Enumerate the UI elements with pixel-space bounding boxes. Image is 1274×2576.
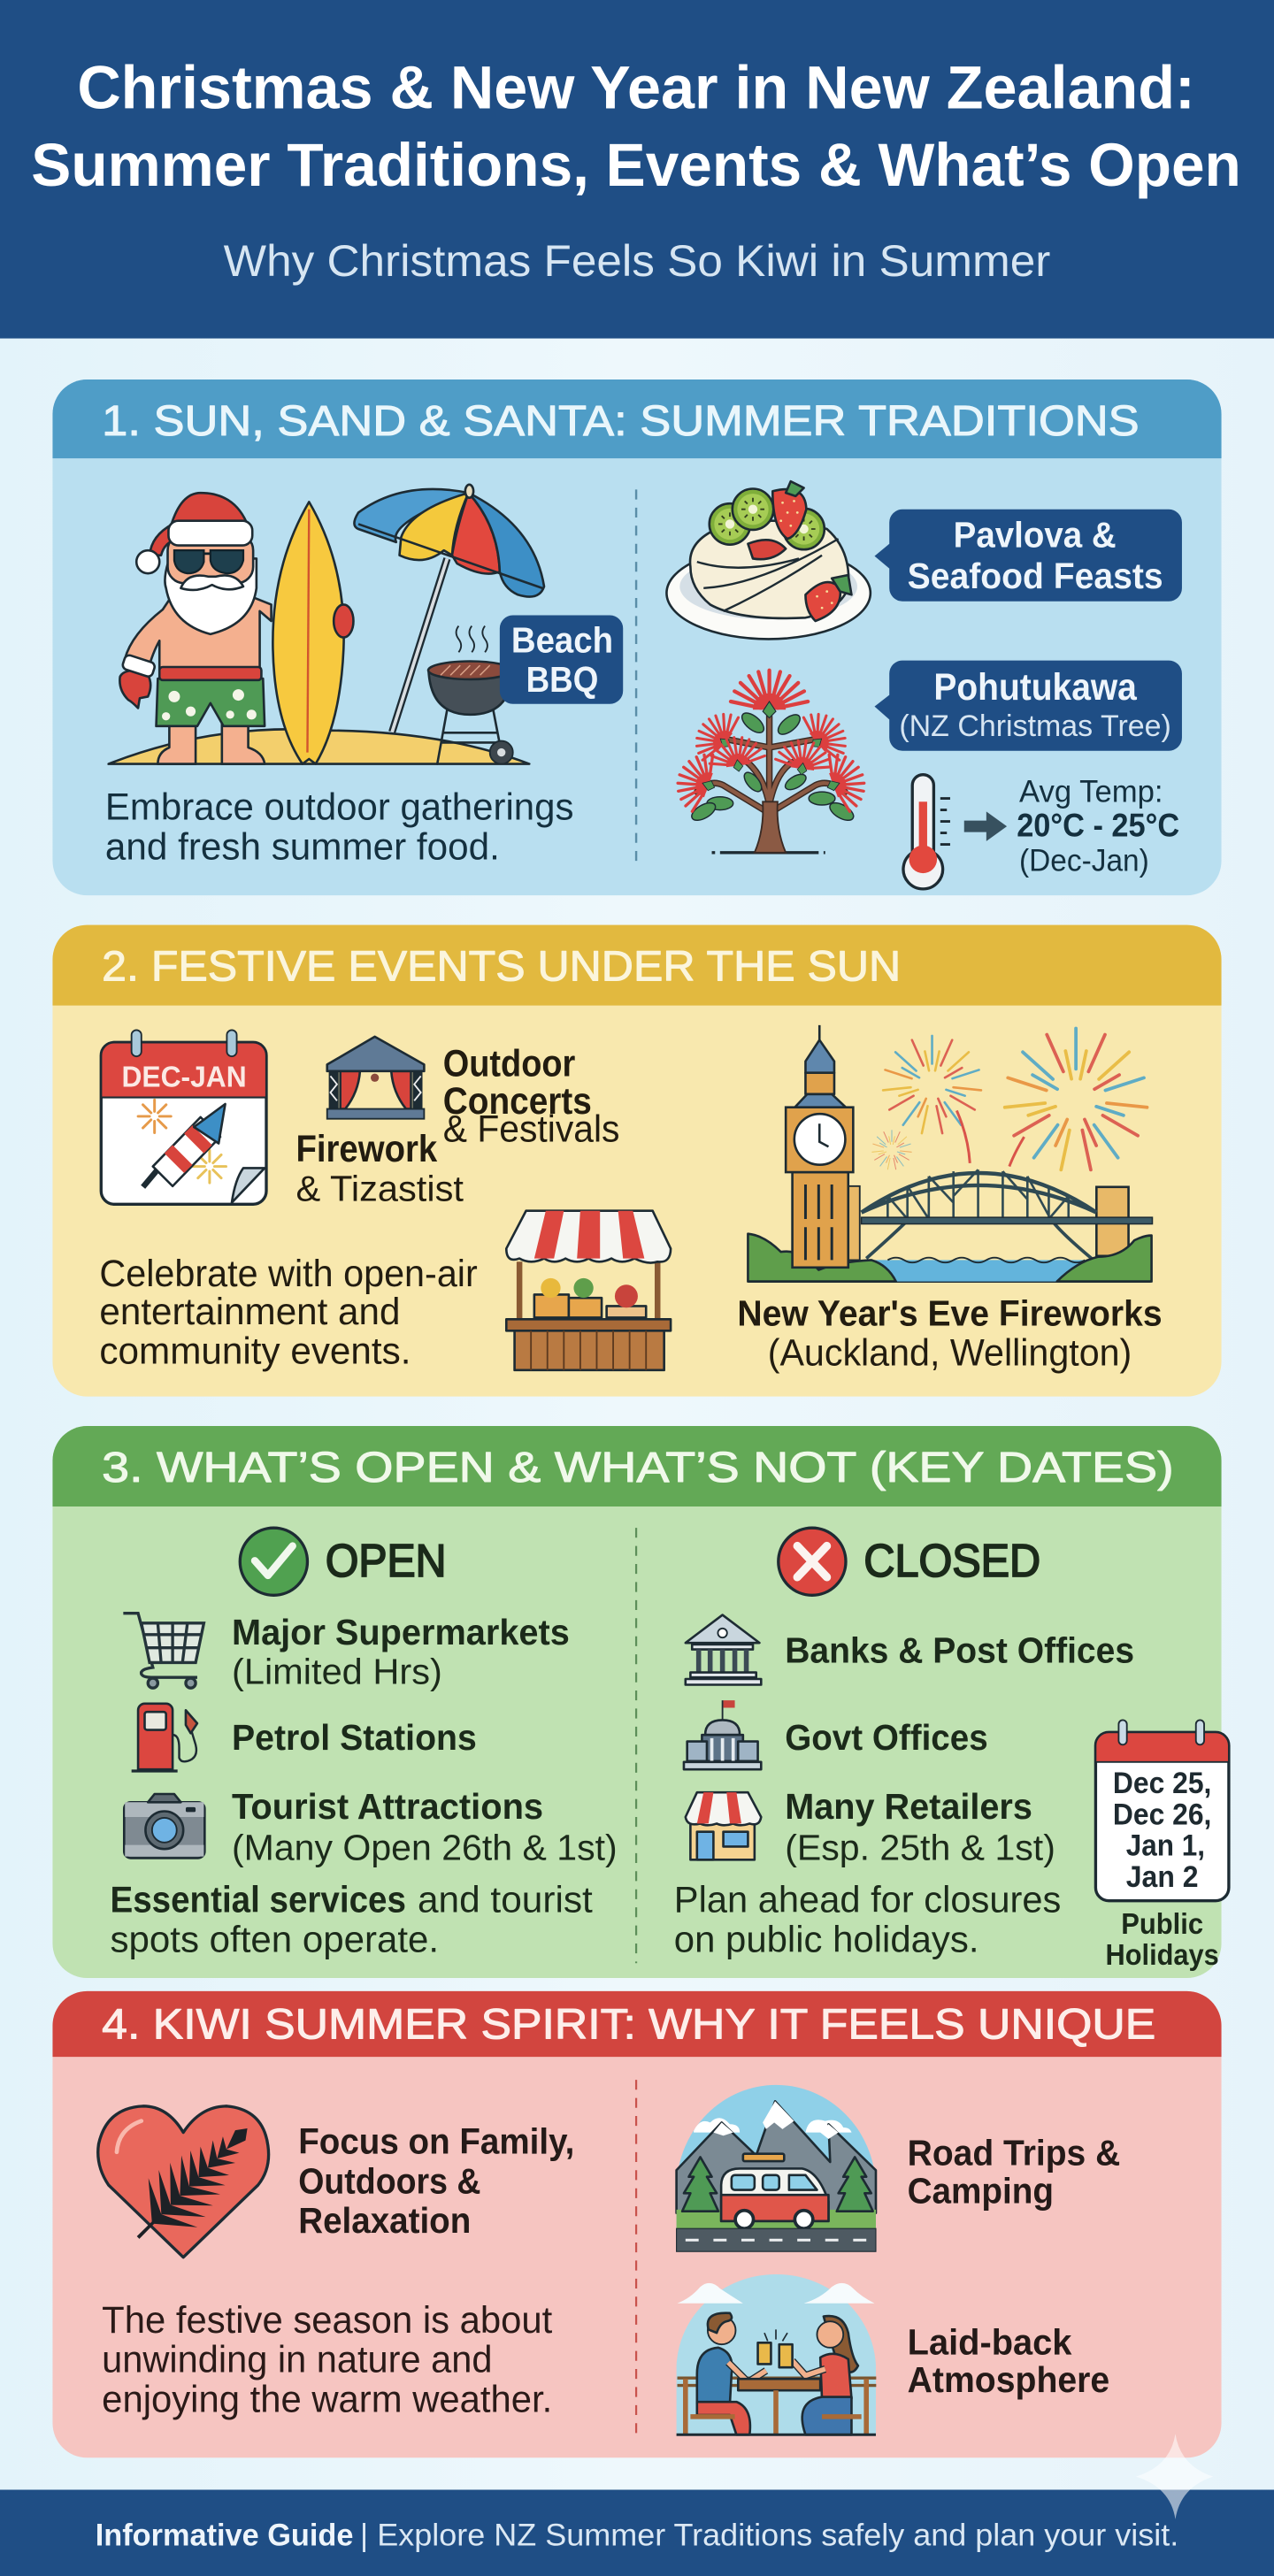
label: outdoor concerts and festivals: Outdoor xyxy=(443,1042,575,1085)
icon: government building xyxy=(684,1700,761,1769)
text: banks and post offices: Banks & Post Offices xyxy=(785,1629,1134,1670)
surfboard xyxy=(272,502,353,764)
caption: public holidays: Public xyxy=(1121,1908,1203,1941)
icon: outdoor stage xyxy=(327,1037,424,1119)
text: festive season: The festive season is about xyxy=(102,2299,552,2342)
text: plan ahead: Plan ahead for closures xyxy=(674,1879,1061,1920)
text: festive season: unwinding in nature and xyxy=(102,2339,492,2381)
label: pohutukawa: (NZ Christmas Tree) xyxy=(899,709,1171,743)
text: essential services: and tourist xyxy=(418,1879,593,1920)
column: open xyxy=(110,1528,618,1959)
text: outdoor gatherings xyxy=(105,786,573,868)
text: festive season: enjoying the warm weather. xyxy=(102,2378,552,2420)
panel 3 heading xyxy=(52,1426,1222,1506)
label: pavlova and seafood feasts: Seafood Feasts xyxy=(908,556,1163,596)
label: outdoor concerts and festivals xyxy=(443,1042,619,1151)
panel 1 heading: 1. SUN, SAND & SANTA: SUMMER TRADITIONS xyxy=(102,397,1140,445)
text: essential services xyxy=(110,1879,593,1959)
title: Christmas & New Year in New Zealand: xyxy=(77,54,1195,122)
icon: dec-jan calendar xyxy=(101,1030,266,1204)
icon: cross xyxy=(779,1528,846,1595)
panel 2 heading xyxy=(52,925,1222,1006)
text: focus on family: Focus on Family, xyxy=(298,2121,574,2162)
public holidays calendar: Jan 1, xyxy=(1126,1829,1205,1863)
caption: new year's eve fireworks xyxy=(737,1293,1163,1374)
icon: market stall xyxy=(506,1211,671,1370)
text: supermarkets: Major Supermarkets xyxy=(232,1612,570,1652)
public holidays calendar: Jan 2 xyxy=(1126,1860,1199,1894)
icon: petrol pump xyxy=(132,1704,197,1771)
label: beach bbq: BBQ xyxy=(526,659,598,700)
text: open-air entertainment: Celebrate with open-air xyxy=(99,1253,478,1295)
icon: shopping cart xyxy=(123,1614,203,1688)
text: laid-back atmosphere xyxy=(908,2321,1109,2400)
text: outdoor gatherings: Embrace outdoor gatherings xyxy=(105,786,573,829)
text: tourist attractions xyxy=(232,1786,618,1867)
label: pohutukawa xyxy=(874,661,1182,751)
icon: retail shop xyxy=(686,1792,761,1859)
panel 4 heading xyxy=(52,1991,1222,2057)
text: supermarkets: (Limited Hrs) xyxy=(232,1652,442,1692)
caption: new year's eve fireworks: New Year's Eve Fireworks xyxy=(737,1293,1163,1334)
text: average temperature: (Dec-Jan) xyxy=(1019,843,1149,878)
label: pohutukawa: Pohutukawa xyxy=(933,666,1138,709)
panel 1: summer traditions xyxy=(52,380,1222,895)
icon: bank xyxy=(686,1615,761,1684)
icon: dec-jan calendar: DEC-JAN xyxy=(121,1062,247,1093)
text: focus on family: Relaxation xyxy=(298,2200,471,2241)
footer text: Informative Guide xyxy=(96,2518,353,2553)
text: open-air entertainment xyxy=(99,1253,478,1372)
text: many retailers: Many Retailers xyxy=(785,1786,1032,1827)
panel 3 heading: 3. WHAT’S OPEN & WHAT’S NOT (KEY DATES) xyxy=(102,1444,1174,1491)
panel 4 heading: 4. KIWI SUMMER SPIRIT: WHY IT FEELS UNIQUE xyxy=(102,2001,1155,2049)
label: beach bbq: Beach xyxy=(511,619,613,660)
header banner xyxy=(0,0,1274,339)
text: average temperature: 20°C - 25°C xyxy=(1017,806,1179,843)
title xyxy=(31,54,1241,199)
text: road trips xyxy=(908,2133,1120,2211)
text: laid-back atmosphere: Atmosphere xyxy=(908,2359,1109,2400)
heading: closed: CLOSED xyxy=(863,1536,1040,1587)
text: supermarkets xyxy=(232,1612,570,1692)
panel 4: kiwi summer spirit xyxy=(52,1991,1222,2457)
text: essential services: Essential services xyxy=(110,1879,406,1920)
label: pavlova and seafood feasts xyxy=(874,510,1182,602)
label: firework and tizastist: Firework xyxy=(295,1128,437,1170)
subtitle: Why Christmas Feels So Kiwi in Summer xyxy=(224,236,1050,286)
text: plan ahead xyxy=(674,1879,1061,1959)
text: tourist attractions: (Many Open 26th & 1st) xyxy=(232,1827,618,1867)
icon: heart with fern xyxy=(98,2104,272,2262)
text: average temperature xyxy=(1017,774,1179,878)
text: petrol stations: Petrol Stations xyxy=(232,1717,477,1758)
panel 1 heading xyxy=(52,380,1222,458)
text: average temperature: Avg Temp: xyxy=(1019,774,1163,809)
illustration: clock tower and harbour bridge xyxy=(748,1025,1153,1282)
icon: camera xyxy=(124,1794,204,1858)
icon: thermometer xyxy=(903,775,950,889)
icon: pohutukawa tree xyxy=(670,671,872,853)
text: open-air entertainment: entertainment and xyxy=(99,1291,400,1333)
beach umbrella xyxy=(354,485,544,732)
text: road trips: Road Trips & xyxy=(908,2133,1120,2174)
text: govt offices: Govt Offices xyxy=(785,1717,988,1758)
bbq grill xyxy=(428,626,513,764)
footer bar xyxy=(0,2489,1274,2576)
caption: new year's eve fireworks: (Auckland, Wellington) xyxy=(768,1331,1132,1374)
text: many retailers xyxy=(785,1786,1055,1867)
label: beach bbq xyxy=(500,616,623,704)
public holidays calendar xyxy=(1095,1720,1229,1972)
label: outdoor concerts and festivals: Concerts xyxy=(443,1080,592,1123)
text: focus on family: Outdoors & xyxy=(298,2160,480,2201)
text: open-air entertainment: community events. xyxy=(99,1330,411,1372)
label: firework and tizastist: & Tizastist xyxy=(295,1169,464,1209)
text: road trips: Camping xyxy=(908,2170,1054,2211)
text: plan ahead: on public holidays. xyxy=(674,1918,979,1959)
label: pavlova and seafood feasts: Pavlova & xyxy=(954,514,1117,555)
fireworks xyxy=(872,1029,1147,1169)
caption: public holidays: Holidays xyxy=(1106,1939,1219,1972)
arrow xyxy=(964,811,1007,841)
footer text: | Explore NZ Summer Traditions safely and plan your visit. xyxy=(360,2518,1178,2553)
clock tower xyxy=(786,1025,853,1268)
caption: public holidays xyxy=(1106,1908,1219,1972)
label: firework and tizastist xyxy=(295,1128,464,1209)
public holidays calendar: Dec 26, xyxy=(1113,1798,1211,1831)
public holidays calendar: Dec 25, xyxy=(1113,1767,1211,1800)
title: Summer Traditions, Events & What’s Open xyxy=(31,131,1241,199)
illustration: road trip xyxy=(677,2085,876,2251)
icon: check xyxy=(240,1528,307,1595)
illustration: laid-back friends xyxy=(677,2274,876,2434)
column: closed xyxy=(674,1528,1134,1959)
panel 3: what's open and closed xyxy=(52,1426,1229,1978)
panel 2: festive events xyxy=(52,925,1222,1397)
text: tourist attractions: Tourist Attractions xyxy=(232,1786,543,1827)
icon: pavlova xyxy=(666,481,871,639)
panel 2 heading: 2. FESTIVE EVENTS UNDER THE SUN xyxy=(102,943,901,991)
label: outdoor concerts and festivals: & Festivals xyxy=(443,1108,619,1151)
text: essential services: spots often operate. xyxy=(110,1918,439,1959)
text: laid-back atmosphere: Laid-back xyxy=(908,2321,1072,2362)
heading: open: OPEN xyxy=(326,1536,446,1587)
text: outdoor gatherings: and fresh summer food. xyxy=(105,825,500,868)
text: focus on family xyxy=(298,2121,574,2241)
santa xyxy=(119,493,272,764)
illustration: santa on the beach xyxy=(109,485,544,764)
text: festive season xyxy=(102,2299,552,2420)
sparkle watermark xyxy=(1136,2434,1213,2519)
text: many retailers: (Esp. 25th & 1st) xyxy=(785,1827,1055,1867)
